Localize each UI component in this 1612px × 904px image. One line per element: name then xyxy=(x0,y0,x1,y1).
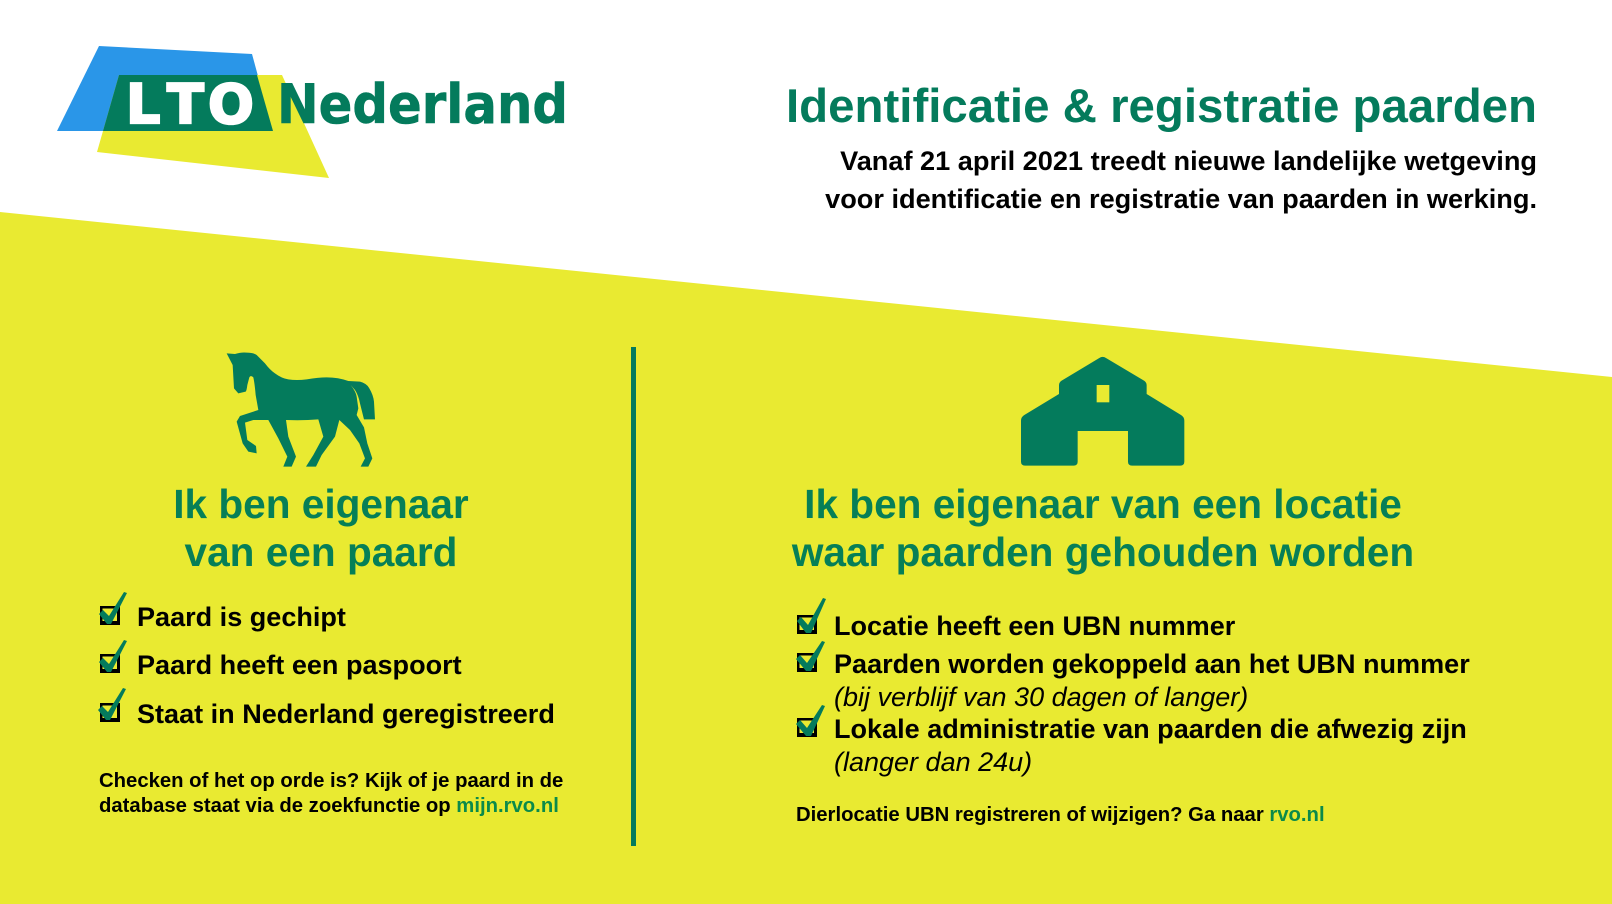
check item 3 xyxy=(98,688,555,729)
note: horse owner: Checken of het op orde is? Kijk of je paard in de xyxy=(99,770,563,792)
heading: location owner: waar paarden gehouden worden xyxy=(791,529,1414,575)
heading: location owner xyxy=(791,481,1414,575)
checklist: location owner xyxy=(796,598,1470,777)
check item 2 xyxy=(99,640,462,680)
check item 2: Paard heeft een paspoort xyxy=(137,650,462,680)
check item 2: (bij verblijf van 30 dagen of langer) xyxy=(834,682,1248,712)
note: horse owner xyxy=(99,770,563,817)
check item 3: Staat in Nederland geregistreerd xyxy=(137,699,555,729)
checklist: horse owner xyxy=(98,592,555,729)
check item 1 xyxy=(797,598,1236,641)
check item 1 xyxy=(99,592,346,632)
heading: location owner: Ik ben eigenaar van een locatie xyxy=(804,481,1402,527)
icon: horse xyxy=(227,352,375,467)
logo: LTO Nederland: Nederland xyxy=(277,73,568,136)
panel: location owner xyxy=(791,357,1470,826)
check item 3: Lokale administratie van paarden die afwezig zijn xyxy=(834,714,1467,744)
logo: LTO Nederland: O xyxy=(208,73,254,136)
divider xyxy=(631,347,636,846)
logo: LTO Nederland: T xyxy=(167,73,204,136)
check item 2: Paarden worden gekoppeld aan het UBN nummer xyxy=(834,649,1470,679)
intro text: voor identificatie en registratie van paarden in werking. xyxy=(825,183,1537,214)
panel: horse owner xyxy=(98,352,563,817)
intro text xyxy=(825,145,1537,214)
intro text: Vanaf 21 april 2021 treedt nieuwe landelijke wetgeving xyxy=(840,145,1537,176)
check item 1: Paard is gechipt xyxy=(137,602,346,632)
heading: horse owner: Ik ben eigenaar xyxy=(173,481,469,527)
note: location owner: Dierlocatie UBN registreren of wijzigen? Ga naar rvo.nl xyxy=(796,804,1325,826)
heading: horse owner xyxy=(173,481,469,575)
title: Identificatie & registratie paarden xyxy=(786,79,1537,132)
note: horse owner: database staat via de zoekfunctie op mijn.rvo.nl xyxy=(99,795,559,817)
logo: LTO Nederland xyxy=(57,46,568,178)
icon: barn xyxy=(1021,357,1184,466)
logo: LTO Nederland: L xyxy=(126,73,160,136)
yellow background band xyxy=(0,212,1612,904)
heading: horse owner: van een paard xyxy=(185,529,457,575)
check item 3: (langer dan 24u) xyxy=(834,747,1032,777)
check item 1: Locatie heeft een UBN nummer xyxy=(834,611,1236,641)
check item 2 xyxy=(796,641,1470,712)
check item 3 xyxy=(796,705,1467,777)
